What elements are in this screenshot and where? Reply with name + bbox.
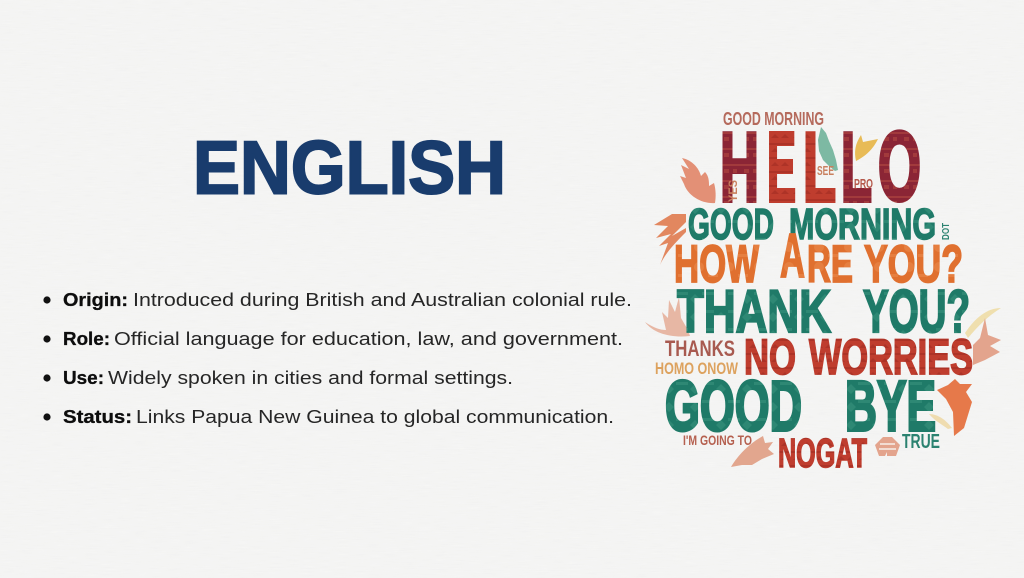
bullet: status: Links Papua New Guinea to global communication. xyxy=(136,406,614,427)
small words inside HELLO: PRO xyxy=(854,176,873,191)
word: GOOD MORNING teal: MORNING xyxy=(789,200,936,249)
bullet: use: Use: xyxy=(63,367,104,388)
icon: patterned shorts xyxy=(875,437,900,456)
word: HOW ARE YOU?: HOW xyxy=(674,235,759,294)
word: HOMO ONOW: HOMO ONOW xyxy=(655,360,738,378)
bullet: use: Widely spoken in cities and formal settings. xyxy=(108,367,513,388)
small words inside HELLO: SEE xyxy=(817,163,834,178)
word: small good morning: GOOD MORNING xyxy=(723,109,824,129)
word: HELLO: O xyxy=(878,111,921,221)
icon: salmon feather right xyxy=(973,318,1001,365)
word: HOW ARE YOU?: YOU? xyxy=(864,235,963,294)
word: HOW ARE YOU? xyxy=(674,222,963,294)
word: HELLO: H xyxy=(720,112,759,222)
word: DOT: DOT xyxy=(941,223,952,240)
icon: teal feather xyxy=(818,127,838,171)
word: GOOD BYE: GOOD xyxy=(665,368,802,446)
word: NO WORRIES: NO xyxy=(744,329,796,385)
bullet: origin: Introduced during British and Australian colonial rule. xyxy=(133,289,632,310)
word: GOOD MORNING teal: GOOD xyxy=(688,200,774,249)
icon: bottom feather xyxy=(731,436,774,467)
word: THANKS: THANKS xyxy=(665,336,735,361)
word: HELLO: L xyxy=(841,112,872,222)
word: HELLO: L xyxy=(803,112,836,222)
icon: orange feather left xyxy=(654,214,686,265)
bullet list xyxy=(43,289,632,427)
word: GOOD BYE: BYE xyxy=(845,368,936,446)
word: I'M GOING TO: I'M GOING TO xyxy=(683,432,752,448)
word: HOW ARE YOU?: A xyxy=(780,222,805,291)
icon: pale yellow feather right xyxy=(965,308,1001,338)
small words inside HELLO xyxy=(726,163,873,202)
icon: salmon feather xyxy=(680,158,716,203)
title: ENGLISH xyxy=(193,126,506,210)
word: NO WORRIES xyxy=(744,329,973,385)
word: HOW ARE YOU?: RE xyxy=(807,235,853,294)
icon: orange feather right xyxy=(937,379,972,436)
bullet: status: Status: xyxy=(63,406,132,427)
word: GOOD MORNING teal xyxy=(688,200,936,249)
word: HELLO xyxy=(720,111,921,222)
word: TRUE: TRUE xyxy=(902,431,940,453)
icon: yellow feather xyxy=(855,135,878,161)
word: NOGAT: NOGAT xyxy=(778,430,867,476)
small words inside HELLO: YES xyxy=(726,180,740,202)
bullet: role: Official language for education, law, and government. xyxy=(114,328,623,349)
word: THANK YOU?: THANK xyxy=(677,278,831,345)
word: HELLO: E xyxy=(767,112,796,222)
bullet: origin: Origin: xyxy=(63,289,128,310)
word cloud xyxy=(645,109,1001,476)
icon: pale feathers left xyxy=(645,297,690,336)
icon: pale feather lower right xyxy=(929,414,952,429)
bullet: role: Role: xyxy=(63,328,110,349)
